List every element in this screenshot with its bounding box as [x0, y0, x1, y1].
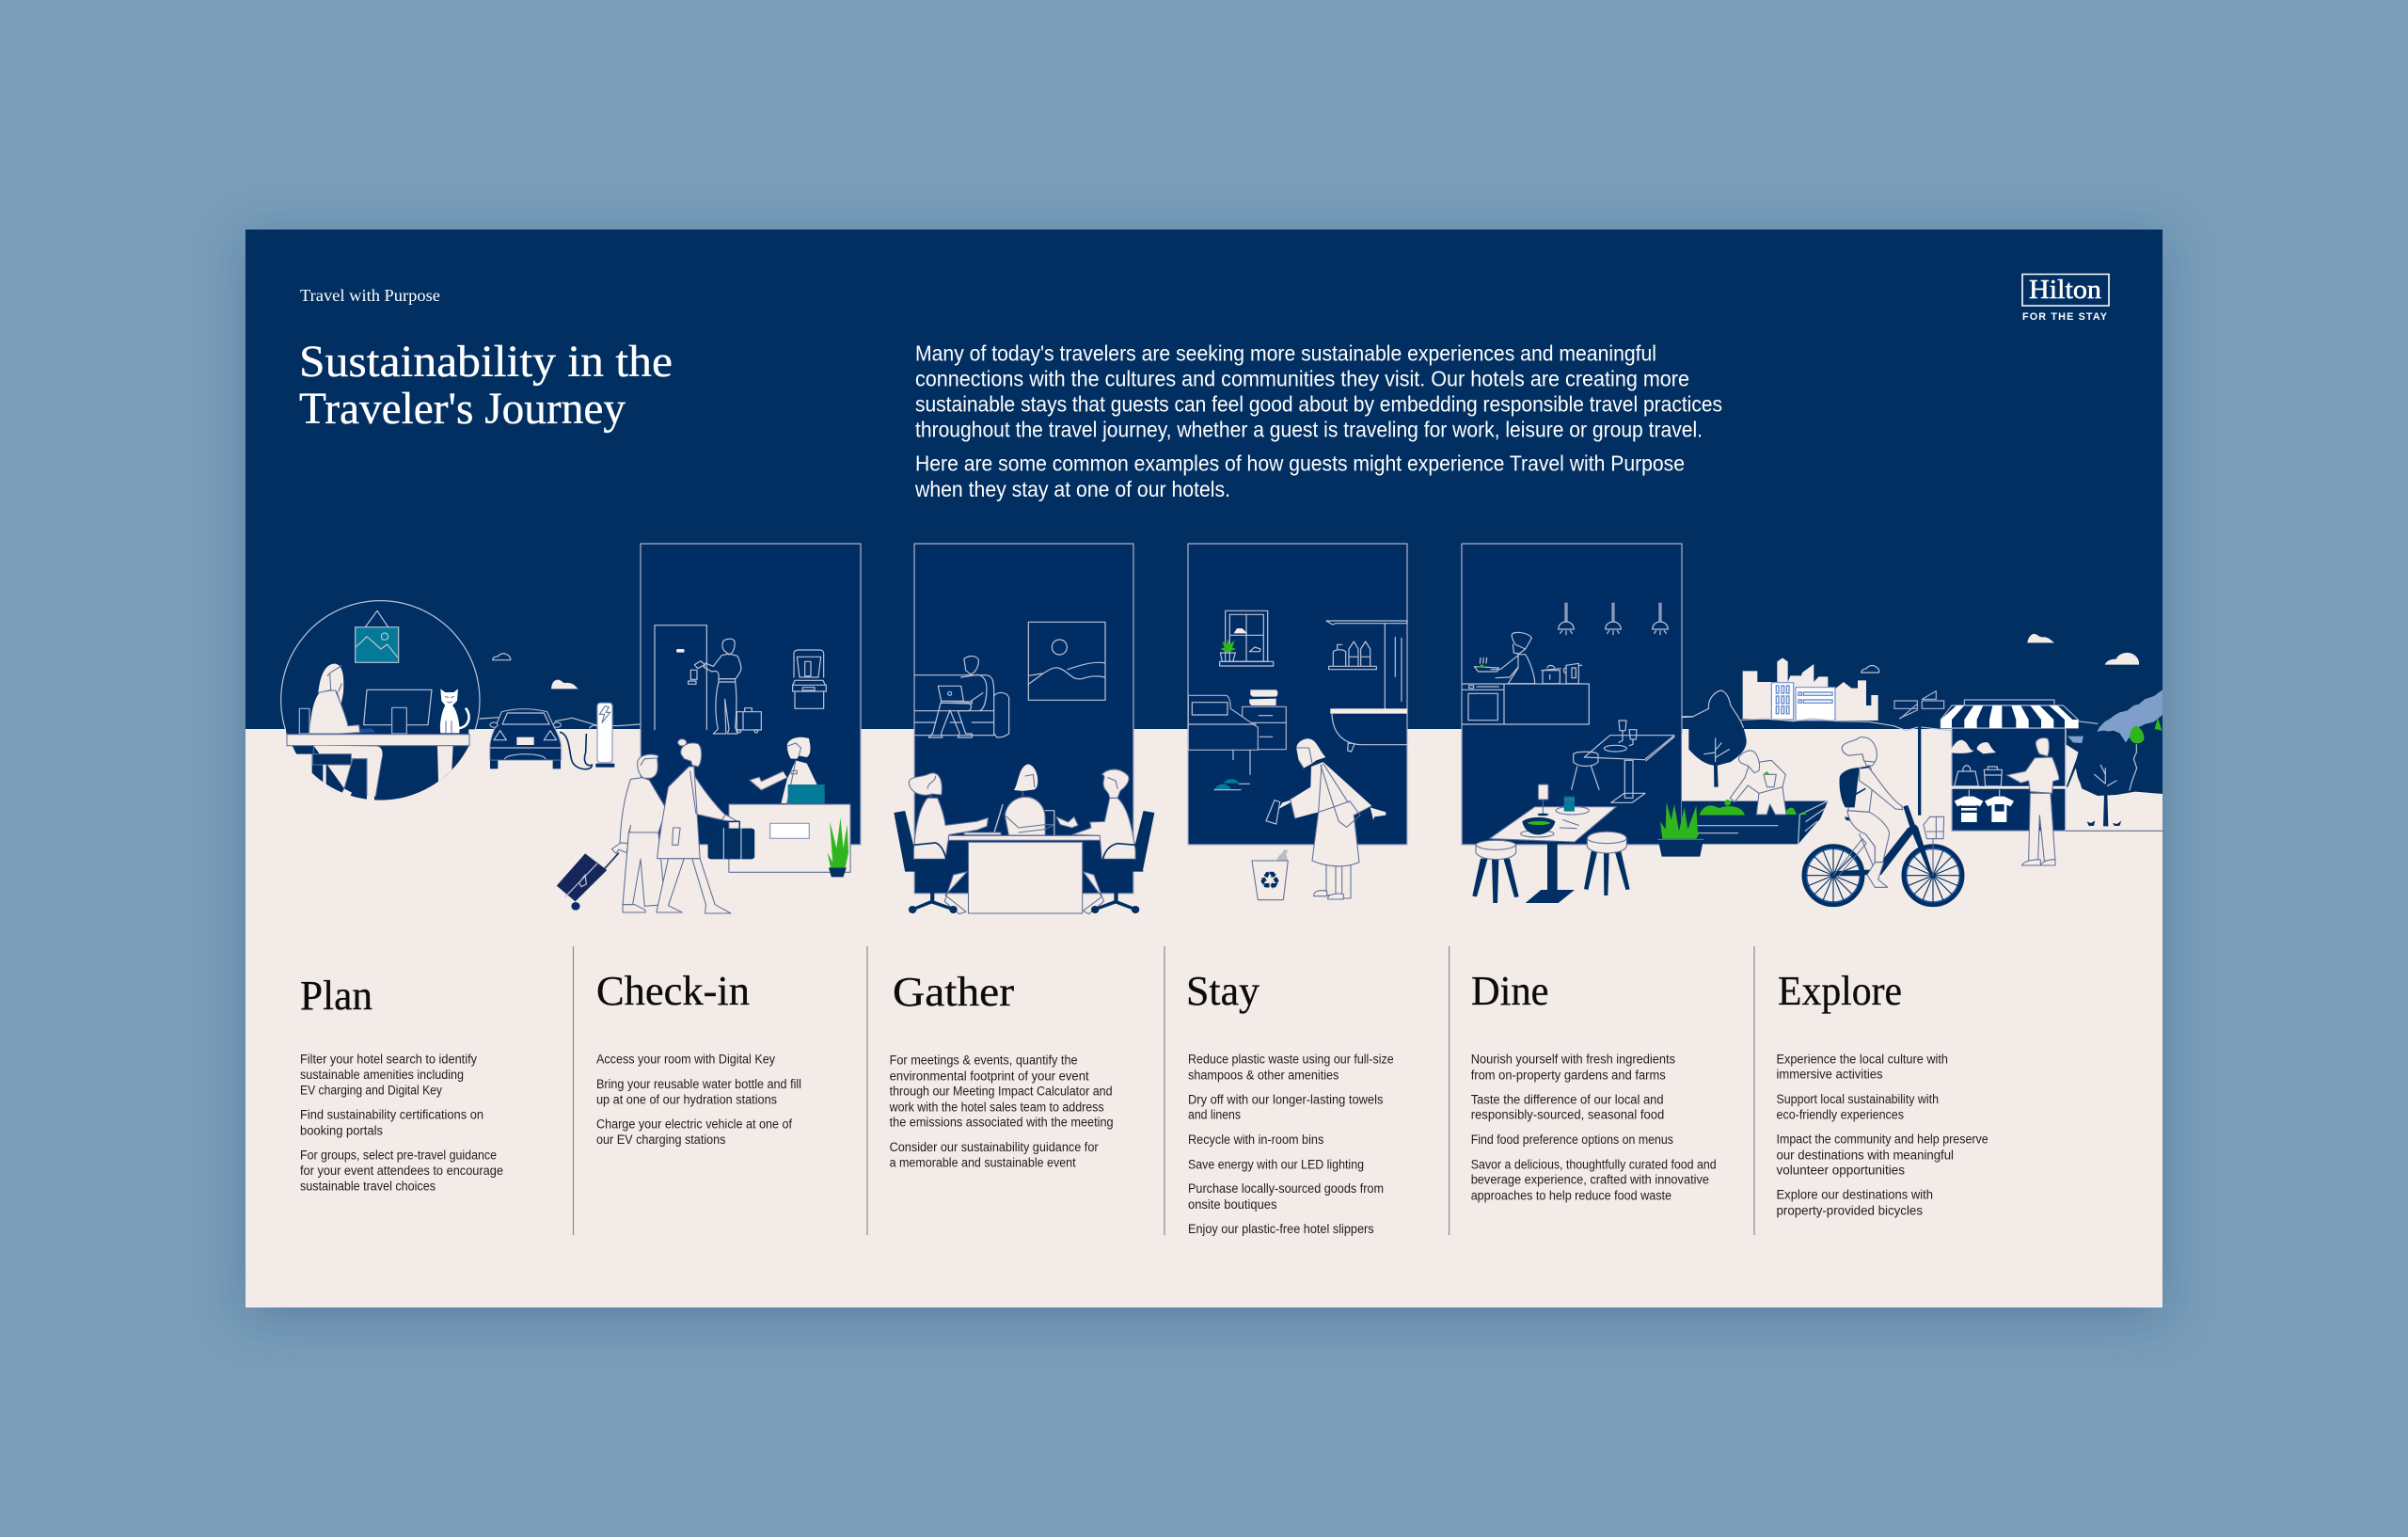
rolling suitcase — [557, 853, 619, 911]
column: Dine: Taste the difference of our local and — [1471, 1092, 1664, 1106]
rider — [1840, 737, 1903, 887]
clouds — [1861, 665, 1879, 673]
column: Check-in: Access your room with Digital Key — [596, 1053, 775, 1067]
column: Stay: shampoos & other amenities — [1188, 1068, 1339, 1082]
column: Plan: EV charging and Digital Key — [300, 1084, 442, 1098]
striped awning — [1941, 705, 2078, 728]
illustration: cyclist — [1804, 737, 1962, 904]
column: Plan: for your event attendees to encourage — [300, 1164, 503, 1178]
column: Stay: Dry off with our longer-lasting towels — [1188, 1092, 1384, 1106]
illustration: check-in people — [557, 737, 850, 913]
intro text: connections with the cultures and communities they visit. Our hotels are creating more — [915, 367, 1689, 391]
landscape: distant hills and charger line — [480, 718, 640, 726]
column: Dine: Dine — [1471, 968, 1548, 1014]
column: Check-in: Charge your electric vehicle at one of — [596, 1117, 792, 1131]
logo: Hilton: Hilton — [2029, 276, 2101, 305]
title: Traveler's Journey — [299, 384, 626, 434]
illustration: Plan — [273, 601, 484, 802]
left person — [905, 773, 989, 914]
column: Gather: For meetings & events, quantify the — [890, 1054, 1078, 1068]
trash bin: ♻ — [1259, 867, 1281, 895]
pendant lamps — [1559, 603, 1668, 635]
column: Stay: Enjoy our plastic-free hotel slippers — [1188, 1222, 1374, 1236]
column: Dine: approaches to help reduce food waste — [1471, 1188, 1671, 1202]
door scene — [655, 626, 826, 734]
panel: poster background — [246, 230, 2162, 1307]
column: Explore: our destinations with meaningful — [1776, 1148, 1954, 1162]
illustration: Dine room — [1462, 544, 1682, 903]
column: Dine: responsibly-sourced, seasonal food — [1471, 1108, 1664, 1122]
column: Stay: Purchase locally-sourced goods from — [1188, 1181, 1384, 1196]
column: Plan: booking portals — [300, 1124, 383, 1138]
cat — [440, 689, 468, 733]
column: Plan: sustainable travel choices — [300, 1180, 436, 1194]
woman recycling — [1266, 738, 1386, 899]
column: Plan: Find sustainability certifications on — [300, 1108, 483, 1122]
right chair and person — [1056, 769, 1154, 914]
illustration: Stay room — [1188, 544, 1407, 900]
basket — [1924, 816, 1944, 876]
column: Gather — [889, 969, 1114, 1170]
bath — [1330, 708, 1407, 752]
column: Check-in: up at one of our hydration stations — [596, 1092, 777, 1106]
column: Explore: immersive activities — [1776, 1068, 1883, 1082]
slippers — [1214, 779, 1249, 790]
signpost — [1894, 691, 1944, 816]
column: Gather: through our Meeting Impact Calculator and — [890, 1085, 1113, 1099]
column: Check-in — [596, 968, 801, 1147]
column: Stay: Reduce plastic waste using our full-size — [1188, 1053, 1394, 1067]
landscape: explore background — [1682, 689, 2162, 934]
column: Gather: environmental footprint of your event — [890, 1069, 1089, 1083]
column: Gather: work with the hotel sales team to address — [889, 1100, 1104, 1114]
column: Explore: Explore our destinations with — [1776, 1188, 1933, 1202]
illustration: market stall — [1941, 700, 2078, 865]
briefcase — [708, 821, 754, 859]
reception laptop — [788, 784, 825, 803]
column: Stay — [1186, 968, 1394, 1236]
guest at door — [722, 639, 735, 655]
window and plant — [1220, 610, 1274, 666]
column: Check-in: our EV charging stations — [596, 1133, 726, 1147]
intro text: Here are some common examples of how guests might experience Travel with Purpose — [915, 452, 1685, 476]
column: Stay: Recycle with in-room bins — [1188, 1133, 1324, 1147]
suitcase — [737, 708, 761, 730]
receptionist — [750, 737, 818, 803]
clouds: plan sky — [493, 654, 578, 689]
column: Plan: sustainable amenities including — [300, 1068, 464, 1082]
shopper — [2006, 738, 2059, 865]
intro text — [914, 341, 1722, 501]
gardener — [1730, 751, 1786, 815]
hydration station — [794, 650, 824, 677]
column: Plan: Plan — [300, 973, 372, 1019]
intro text: sustainable stays that guests can feel good about by embedding responsible travel practices — [915, 391, 1722, 416]
reception plant — [828, 817, 848, 877]
computer monitor — [299, 689, 432, 734]
illustration: Check-in room — [641, 544, 861, 845]
intro text: throughout the travel journey, whether a guest is traveling for work, leisure or group travel. — [915, 417, 1703, 441]
column: Explore: eco-friendly experiences — [1776, 1107, 1904, 1121]
t-shirts — [1955, 790, 2014, 822]
illustration: trees and garden planter — [1682, 690, 1828, 844]
trash bin — [1252, 849, 1288, 900]
desk — [287, 735, 469, 746]
column: Dine: Savor a delicious, thoughtfully curated food and — [1471, 1157, 1717, 1171]
column: Explore: volunteer opportunities — [1776, 1164, 1905, 1178]
front table setting — [1489, 784, 1616, 842]
column: Stay: and linens — [1188, 1108, 1241, 1122]
woman with coat — [657, 739, 737, 913]
column: Explore: property-provided bicycles — [1776, 1203, 1923, 1217]
left chair — [894, 811, 946, 872]
logo: Hilton: FOR THE STAY — [2022, 311, 2108, 323]
column: Explore: Experience the local culture with — [1776, 1052, 1948, 1066]
column: Gather: Consider our sustainability guidance for — [890, 1140, 1099, 1154]
bicycle — [1804, 805, 1962, 904]
planter — [1682, 801, 1828, 844]
man — [611, 754, 666, 912]
column: Dine — [1471, 968, 1717, 1202]
chef — [1474, 632, 1535, 684]
cream ground — [1682, 734, 2162, 934]
logo: Hilton — [2022, 275, 2109, 323]
column: Stay: Stay — [1186, 968, 1259, 1014]
kitchen counter and oven — [1463, 663, 1589, 724]
roof — [1964, 700, 2054, 705]
hat and cap — [1948, 740, 1973, 753]
column: Gather: a memorable and sustainable event — [890, 1156, 1076, 1170]
illustration: gather meeting — [894, 764, 1154, 914]
column: Dine: beverage experience, crafted with innovative — [1471, 1173, 1709, 1187]
column: Explore: Explore — [1778, 968, 1902, 1014]
column: Explore: Impact the community and help preserve — [1776, 1133, 1988, 1147]
eyebrow: Travel with Purpose — [300, 286, 440, 305]
column: Dine: Find food preference options on menus — [1471, 1133, 1673, 1147]
column: Check-in: Check-in — [596, 968, 750, 1014]
framed art — [1028, 622, 1105, 700]
navy forest and hills — [2067, 699, 2162, 796]
bed and nightstand — [1188, 689, 1286, 774]
reception desk — [729, 804, 850, 872]
ground birds — [2087, 821, 2121, 826]
title: Sustainability in the — [299, 337, 673, 387]
intro text: Many of today's travelers are seeking more sustainable experiences and meaningful — [915, 341, 1656, 365]
wall picture — [356, 610, 399, 662]
column: Check-in: Bring your reusable water bottle and fill — [596, 1077, 801, 1091]
dividers — [574, 946, 1754, 1235]
intro text: when they stay at one of our hotels. — [914, 477, 1230, 501]
column: Stay: Save energy with our LED lighting — [1188, 1157, 1364, 1171]
column: Gather: the emissions associated with the meeting — [890, 1116, 1114, 1130]
column: Explore — [1776, 968, 1988, 1217]
legs and chair — [312, 746, 383, 800]
column: Dine: Nourish yourself with fresh ingredients — [1471, 1053, 1675, 1067]
bags — [1955, 766, 1978, 786]
column: Plan: Filter your hotel search to identify — [300, 1053, 477, 1067]
stools — [1472, 832, 1630, 903]
tree — [1688, 690, 1747, 766]
river line — [1682, 717, 1950, 731]
green trees — [2130, 726, 2144, 743]
illustration: electric car — [490, 709, 562, 768]
illustration: EV charger — [560, 703, 614, 769]
column: Stay: onsite boutiques — [1188, 1197, 1277, 1212]
front table stand — [1526, 842, 1575, 903]
centre person — [963, 764, 1054, 835]
column: Dine: from on-property gardens and farms — [1471, 1068, 1666, 1082]
meeting table — [948, 835, 1101, 913]
room circle — [281, 601, 480, 800]
column: Gather: Gather — [893, 969, 1014, 1015]
back table — [1572, 721, 1674, 802]
sofa and man with laptop — [914, 657, 1009, 737]
title — [299, 337, 673, 434]
seated woman — [309, 664, 375, 734]
shower and bottles — [1326, 621, 1407, 708]
column: Plan — [300, 973, 503, 1194]
column: Explore: Support local sustainability with — [1776, 1092, 1939, 1106]
illustration: planter plant — [1658, 802, 1703, 857]
illustration: Gather room — [914, 544, 1133, 894]
column: Plan: For groups, select pre-travel guidance — [300, 1149, 497, 1163]
illustration: skyline — [1682, 634, 2139, 731]
